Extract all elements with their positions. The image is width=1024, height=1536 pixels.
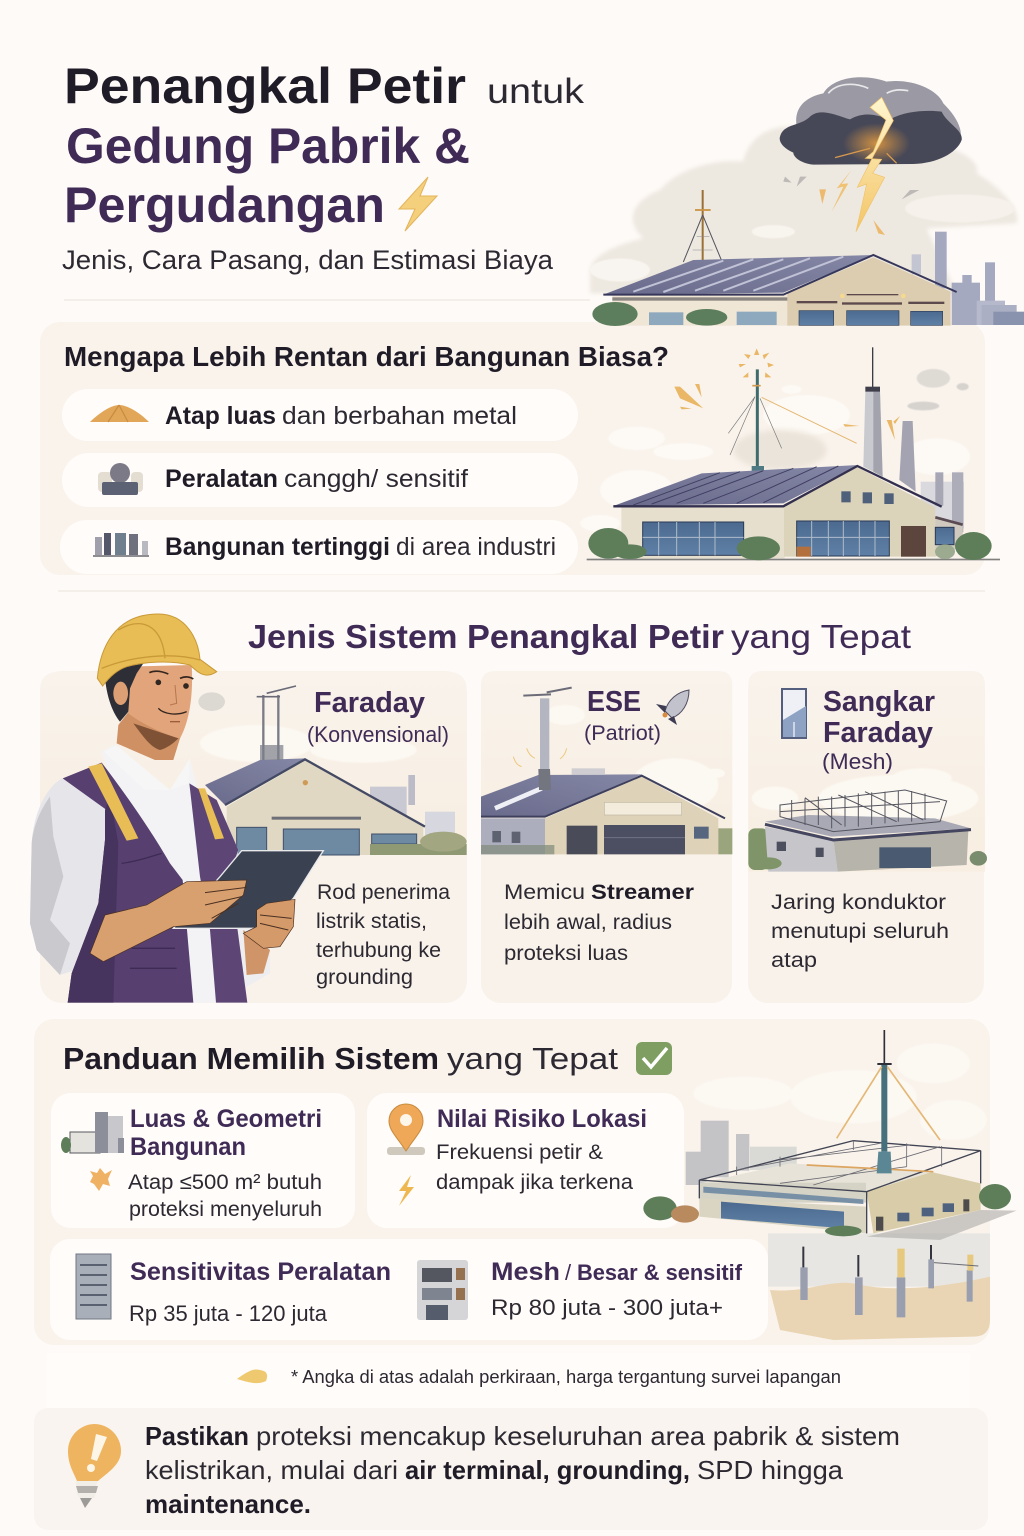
clouds (580, 369, 970, 532)
title (64, 58, 585, 233)
icon: roof (90, 405, 149, 422)
factory (699, 1141, 981, 1233)
panel background (34, 1019, 990, 1345)
card: equipment sensitivity and mesh cost (50, 1239, 768, 1340)
card: equipment sensitivity and mesh cost: Besar & sensitif (577, 1260, 743, 1285)
card: area and geometry: Atap ≤500 m² butuh (128, 1171, 322, 1194)
panel background (40, 322, 985, 575)
callout text: proteksi mencakup keseluruhan area pabrik & sistem (256, 1421, 900, 1451)
panel illustration: mesh-protected factory with ground rods (643, 1030, 1017, 1340)
icon: equipment (98, 463, 143, 495)
card: equipment sensitivity and mesh cost: Rp 35 juta - 120 juta (129, 1301, 328, 1326)
icon: building (61, 1112, 124, 1153)
icon: leaf (237, 1369, 267, 1383)
card title: Sangkar (823, 686, 935, 718)
section heading: system types (248, 618, 911, 655)
icon: server rack (76, 1254, 111, 1319)
mast (837, 1030, 940, 1173)
panel: selection guide (34, 1019, 1017, 1345)
panel: closing callout (34, 1408, 988, 1530)
collar (104, 745, 190, 790)
beige storm haze (590, 127, 1017, 293)
vest left shadow (68, 797, 118, 1003)
hero illustration: storm over factory (590, 77, 1024, 326)
title line 3: Pergudangan (64, 177, 385, 233)
card description (504, 881, 694, 965)
card: Faraday cage mesh (748, 671, 987, 1003)
card description (316, 881, 450, 989)
hard hat (97, 614, 217, 686)
illustration: engineer with tablet (30, 614, 323, 1003)
card description: menutupi seluruh (771, 920, 949, 943)
title line 2: Gedung Pabrik & (66, 118, 470, 174)
pill: tallest building: Bangunan tertinggi (165, 533, 390, 561)
sand (770, 1277, 990, 1340)
vest stripes (88, 763, 224, 841)
sky clouds (693, 1043, 987, 1140)
card: ESE patriot (481, 671, 732, 1003)
icon: rocket (656, 690, 689, 725)
callout text: SPD hingga (697, 1455, 844, 1485)
subtitle: Jenis, Cara Pasang, dan Estimasi Biaya (62, 245, 554, 275)
icon: title lightning bolt (399, 177, 437, 231)
note bar: * Angka di atas adalah perkiraan, harga tergantung survei lapangan (291, 1367, 841, 1387)
callout text: maintenance. (145, 1489, 311, 1519)
pill: metal roof: dan berbahan metal (282, 402, 517, 430)
card description: listrik statis, (316, 910, 427, 933)
icon: orange burst (90, 1168, 112, 1191)
rod (728, 369, 857, 480)
card: area and geometry: Bangunan (130, 1133, 246, 1161)
panel illustration: factory with lightning rod (580, 347, 1000, 560)
ear (113, 682, 128, 705)
section heading: system types: Jenis Sistem Penangkal Petir (248, 618, 724, 655)
icon: check mark (636, 1042, 672, 1075)
icon: small bolt (399, 1175, 414, 1206)
card description: terhubung ke (316, 939, 441, 962)
pill: metal roof (62, 389, 578, 441)
card title: (Mesh) (822, 749, 893, 774)
card: location risk: Nilai Risiko Lokasi (437, 1105, 647, 1133)
callout text (145, 1421, 900, 1519)
near sleeve (30, 778, 107, 975)
building (587, 465, 1000, 560)
card title (307, 687, 449, 747)
tablet (173, 851, 323, 928)
icon: office block (417, 1260, 468, 1320)
warehouse (592, 255, 957, 326)
city silhouette (686, 1121, 797, 1185)
lightning bolt (783, 97, 919, 235)
shirt front (102, 745, 222, 1003)
icon: light bulb (68, 1424, 121, 1508)
callout text: Pastikan (145, 1421, 249, 1451)
vest pocket seams (122, 853, 177, 968)
card: equipment sensitivity and mesh cost: Mesh (491, 1258, 560, 1286)
card illustration: mesh building (748, 671, 987, 872)
card description: proteksi luas (504, 942, 628, 965)
ground band (768, 1233, 990, 1287)
pill: sensitive equipment (62, 453, 578, 507)
icon: location pin (387, 1104, 425, 1155)
card title (584, 686, 661, 745)
card title: (Patriot) (584, 722, 661, 745)
vest right (189, 783, 247, 1003)
lightning mast (683, 190, 721, 262)
section heading: system types: yang Tepat (731, 618, 911, 655)
card description: Rod penerima (317, 881, 450, 904)
card title: Faraday (823, 717, 933, 749)
far hand finger lines (260, 915, 292, 930)
card description: lebih awal, radius (504, 911, 672, 934)
neck (117, 710, 187, 760)
card title (822, 686, 935, 774)
card background (748, 671, 984, 1003)
title line 1: Penangkal Petir (64, 58, 466, 114)
panel heading: yang Tepat (447, 1041, 618, 1076)
haze behind rod (733, 430, 827, 470)
chimneys (863, 347, 964, 532)
pill: tallest building (60, 520, 578, 574)
title line 1: untuk (487, 72, 585, 111)
pill: tallest building: di area industri (396, 533, 556, 561)
near arm and hand (90, 880, 247, 962)
card description: atap (771, 949, 817, 972)
card title: ESE (587, 686, 641, 718)
hard hat ridge (102, 624, 200, 668)
pill: metal roof: Atap luas (165, 402, 276, 430)
card description (771, 891, 949, 972)
callout text: kelistrikan, mulai dari (145, 1455, 398, 1485)
facial features (149, 671, 193, 722)
face (128, 665, 192, 738)
card: equipment sensitivity and mesh cost: / (565, 1260, 572, 1285)
pill: sensitive equipment: Peralatan (165, 465, 278, 493)
card: location risk (367, 1093, 684, 1228)
card illustration: warehouse (40, 672, 467, 855)
hair (105, 663, 143, 722)
ground rods (800, 1245, 978, 1317)
card description: Jaring konduktor (771, 891, 946, 914)
panel heading (63, 1041, 618, 1076)
factory silhouette (912, 232, 1024, 325)
note bar (47, 1353, 970, 1408)
near hand finger lines (205, 887, 247, 918)
card: Faraday conventional (40, 671, 467, 1003)
far forearm (243, 930, 270, 975)
panel heading: Mengapa Lebih Rentan dari Bangunan Biasa? (64, 341, 669, 372)
card background (40, 671, 467, 1003)
sleeve shading (30, 797, 70, 975)
card: equipment sensitivity and mesh cost: Rp 80 juta - 300 juta+ (491, 1295, 723, 1320)
bushes (643, 1184, 1011, 1236)
pill: sensitive equipment: canggh/ sensitif (284, 465, 468, 493)
panel heading: Panduan Memilih Sistem (63, 1041, 439, 1076)
neck shadow (133, 723, 178, 750)
vest left (63, 763, 193, 1003)
card description: grounding (316, 966, 413, 989)
sparks (674, 348, 900, 440)
far sleeve (203, 800, 270, 987)
card title: (Konvensional) (307, 722, 449, 747)
card: area and geometry (51, 1093, 355, 1228)
card: area and geometry: Luas & Geometri (130, 1105, 322, 1133)
storm cloud (780, 77, 962, 165)
icon: window (782, 689, 806, 738)
card illustration: ESE building (481, 671, 732, 854)
card description: Streamer (591, 881, 694, 904)
card background (481, 671, 732, 1003)
card: location risk: Frekuensi petir & (436, 1141, 603, 1164)
card description: Memicu (504, 881, 585, 904)
panel: why more vulnerable (40, 322, 1000, 575)
icon: buildings (93, 533, 149, 557)
card title: Faraday (314, 687, 425, 719)
card: equipment sensitivity and mesh cost: Sensitivitas Peralatan (130, 1258, 391, 1286)
card: location risk: dampak jika terkena (436, 1171, 633, 1194)
card: area and geometry: proteksi menyeluruh (129, 1198, 322, 1221)
callout text: air terminal, grounding, (405, 1455, 690, 1485)
far hand (243, 899, 295, 948)
